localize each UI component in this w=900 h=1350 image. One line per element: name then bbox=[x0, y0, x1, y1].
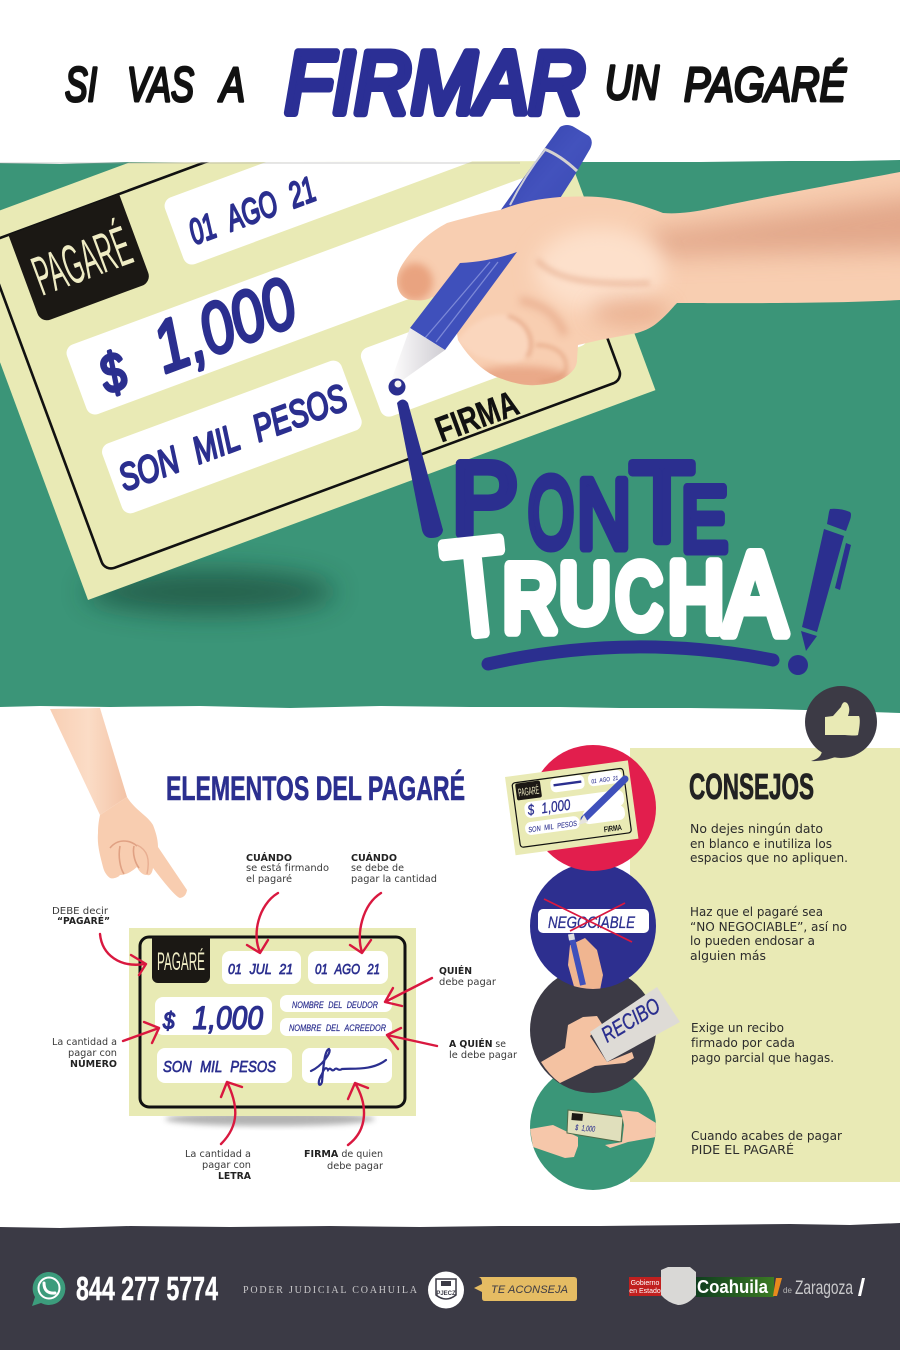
tip 2 text: lo pueden endosar a bbox=[690, 934, 815, 948]
label: cantidad con número: La cantidad a bbox=[52, 1037, 117, 1048]
small pen bbox=[578, 779, 625, 825]
word TRUCHA: R bbox=[503, 546, 557, 651]
seal bbox=[428, 1272, 464, 1308]
tip 4 text: Cuando acabes de pagar bbox=[691, 1129, 842, 1143]
tip 4 text bbox=[691, 1129, 842, 1157]
tip 2 text: Haz que el pagaré sea bbox=[690, 905, 823, 919]
logo: gobierno de coahuila: de bbox=[783, 1286, 792, 1295]
finger two bbox=[536, 345, 566, 382]
word TRUCHA: C bbox=[616, 547, 662, 647]
cheque body: 01 AGO 21 bbox=[315, 961, 380, 978]
logo: gobierno de coahuila: Zaragoza bbox=[795, 1278, 853, 1299]
large pagaré cheque: 01 AGO 21 bbox=[183, 168, 321, 253]
title: A bbox=[218, 59, 245, 112]
word PONTE bbox=[452, 440, 728, 571]
tip 3 text: firmado por cada bbox=[691, 1036, 795, 1050]
large pagaré cheque: PAGARÉ bbox=[24, 214, 140, 307]
word PONTE: T bbox=[630, 440, 694, 565]
illustration: hand holding pen bbox=[396, 172, 900, 386]
cheque body bbox=[129, 928, 416, 1116]
label: firma de quien debe pagar bbox=[304, 1149, 384, 1172]
label: cantidad con letra: pagar con bbox=[202, 1160, 251, 1171]
label: cantidad con letra bbox=[185, 1149, 251, 1182]
receipt bbox=[590, 987, 680, 1062]
signature bbox=[311, 1049, 386, 1085]
logo: gobierno de coahuila: en Estado bbox=[629, 1288, 661, 1295]
word TRUCHA: H bbox=[668, 542, 724, 652]
tip 3 text bbox=[691, 1021, 834, 1065]
icon: pen upper part bbox=[490, 125, 592, 245]
tip 3 text: pago parcial que hagas. bbox=[691, 1051, 834, 1065]
label: cuándo firmando bbox=[246, 851, 329, 885]
circle: no dejes datos en blanco bbox=[505, 745, 656, 871]
logo: gobierno de coahuila: Coahuila bbox=[697, 1277, 769, 1297]
label: cuándo firmando: se está firmando bbox=[246, 862, 329, 874]
title: PAGARÉ bbox=[684, 59, 847, 112]
circle: no dejes datos en blanco: PAGARÉ bbox=[517, 784, 540, 799]
underline stroke bbox=[488, 647, 773, 664]
tip 2 text bbox=[690, 905, 847, 963]
title: SI bbox=[65, 59, 97, 112]
icon: whatsapp bbox=[32, 1272, 65, 1306]
cheque body: $ 1,000 bbox=[162, 1000, 263, 1036]
tip 2 text: “NO NEGOCIABLE”, así no bbox=[690, 920, 847, 934]
opening exclamation drawn as pen stroke bbox=[388, 378, 443, 538]
label: cuándo pagar: CUÁNDO bbox=[351, 851, 397, 864]
logo: gobierno de coahuila bbox=[629, 1267, 865, 1305]
cheque shadow bbox=[85, 570, 335, 614]
circle: pide el pagaré: $ 1,000 bbox=[574, 1123, 596, 1134]
circle: no dejes datos en blanco: SON MIL PESOS bbox=[528, 819, 577, 834]
illustration: pointing hand bbox=[50, 708, 187, 898]
panel: consejos background bbox=[630, 748, 900, 1182]
circle: no dejes datos en blanco: 01 AGO 21 bbox=[591, 776, 619, 785]
title: UN bbox=[605, 57, 659, 110]
label: a quién se le debe pagar: A QUIÉN se bbox=[449, 1037, 506, 1050]
label: debe decir pagaré bbox=[52, 906, 110, 927]
tip 2 text: alguien más bbox=[690, 949, 766, 963]
arrows bbox=[100, 893, 437, 1145]
label: cuándo firmando: el pagaré bbox=[246, 873, 292, 885]
label: cuándo pagar bbox=[351, 851, 437, 885]
label: cuándo firmando: CUÁNDO bbox=[246, 851, 292, 864]
word PONTE: N bbox=[577, 459, 631, 569]
receipt: RECIBO bbox=[597, 993, 664, 1047]
label: quién debe pagar: debe pagar bbox=[439, 977, 497, 988]
label: a quién se le debe pagar: le debe pagar bbox=[449, 1050, 518, 1061]
word TRUCHA: T bbox=[437, 511, 514, 664]
te aconseja tag: TE ACONSEJA bbox=[491, 1284, 568, 1296]
phone number: 844 277 5774 bbox=[76, 1270, 218, 1307]
large pagaré cheque: SON MIL PESOS bbox=[113, 377, 353, 500]
heading: Ponte Trucha bbox=[388, 378, 851, 675]
circle: no dejes datos en blanco: FIRMA bbox=[603, 823, 623, 834]
diagram: pagaré elements bbox=[52, 851, 518, 1182]
label: quién debe pagar bbox=[439, 964, 497, 988]
panel: hero green band bbox=[0, 160, 900, 713]
circle: pide el pagaré bbox=[530, 1078, 656, 1190]
label: debe decir pagaré: DEBE decir bbox=[52, 906, 109, 917]
cheque body: PAGARÉ bbox=[157, 947, 205, 976]
label: a quién se le debe pagar bbox=[449, 1037, 518, 1061]
label: cantidad con número: NÚMERO bbox=[70, 1057, 117, 1070]
hand holding receipt bbox=[541, 1016, 634, 1083]
seal: PJECZ bbox=[436, 1291, 456, 1297]
label: cuándo pagar: pagar la cantidad bbox=[351, 874, 437, 885]
label: firma de quien debe pagar: FIRMA de quien bbox=[304, 1149, 383, 1160]
panel: footer bbox=[0, 1223, 900, 1350]
tip 1 text bbox=[690, 822, 848, 865]
tip 3 text: Exige un recibo bbox=[691, 1021, 784, 1035]
te aconseja tag bbox=[474, 1277, 577, 1301]
logo: gobierno de coahuila: Gobierno bbox=[631, 1280, 660, 1287]
circle: no negociable: NEGOCIABLE bbox=[548, 913, 636, 932]
title: FIRMAR bbox=[285, 33, 585, 132]
word TRUCHA: U bbox=[560, 548, 610, 639]
cheque body: SON MIL PESOS bbox=[163, 1059, 276, 1076]
circle: no negociable bbox=[530, 863, 656, 990]
finger one bbox=[456, 315, 530, 362]
pen lower part bbox=[410, 252, 517, 350]
title: VAS bbox=[127, 59, 194, 112]
label: cantidad con letra: LETRA bbox=[218, 1171, 251, 1182]
large pagaré cheque: $ 1,000 bbox=[85, 263, 307, 410]
label: debe decir pagaré: “PAGARÉ” bbox=[57, 914, 110, 927]
word TRUCHA: A bbox=[724, 529, 787, 659]
cheque body: NOMBRE DEL ACREEDOR bbox=[289, 1023, 386, 1033]
label: quién debe pagar: QUIÉN bbox=[439, 964, 472, 977]
tip 1 text: en blanco e inutiliza los bbox=[690, 837, 832, 851]
large pagaré cheque: FIRMA bbox=[430, 382, 524, 450]
large pagaré cheque bbox=[0, 161, 656, 600]
tip 1 text: espacios que no apliquen. bbox=[690, 851, 848, 865]
label: firma de quien debe pagar: debe pagar bbox=[327, 1161, 384, 1172]
label: cantidad con número bbox=[52, 1037, 117, 1070]
label: cantidad con número: pagar con bbox=[68, 1048, 117, 1059]
word TRUCHA bbox=[437, 511, 787, 664]
title bbox=[65, 33, 847, 132]
cheque shadow bbox=[165, 1112, 375, 1126]
cheque body: NOMBRE DEL DEUDOR bbox=[292, 1000, 378, 1010]
circle: no dejes datos en blanco: $ 1,000 bbox=[526, 797, 572, 819]
circle: exige recibo bbox=[530, 967, 680, 1093]
label: cuándo pagar: se debe de bbox=[351, 863, 404, 874]
label: cantidad con letra: La cantidad a bbox=[185, 1149, 251, 1160]
tip 4 text: PIDE EL PAGARÉ bbox=[691, 1142, 794, 1157]
poder judicial: PODER JUDICIAL COAHUILA bbox=[243, 1285, 418, 1296]
closing exclamation shaped as pen bbox=[788, 509, 851, 675]
heading: consejos: CONSEJOS bbox=[689, 766, 814, 807]
word PONTE: O bbox=[528, 457, 574, 569]
word PONTE: E bbox=[681, 469, 728, 571]
cheque body: 01 JUL 21 bbox=[228, 961, 293, 978]
tip 1 text: No dejes ningún dato bbox=[690, 822, 823, 836]
word PONTE: P bbox=[452, 442, 518, 556]
heading: elementos del pagaré: ELEMENTOS DEL PAGARÉ bbox=[166, 770, 465, 808]
icon: thumbs up speech bubble bbox=[805, 686, 877, 761]
